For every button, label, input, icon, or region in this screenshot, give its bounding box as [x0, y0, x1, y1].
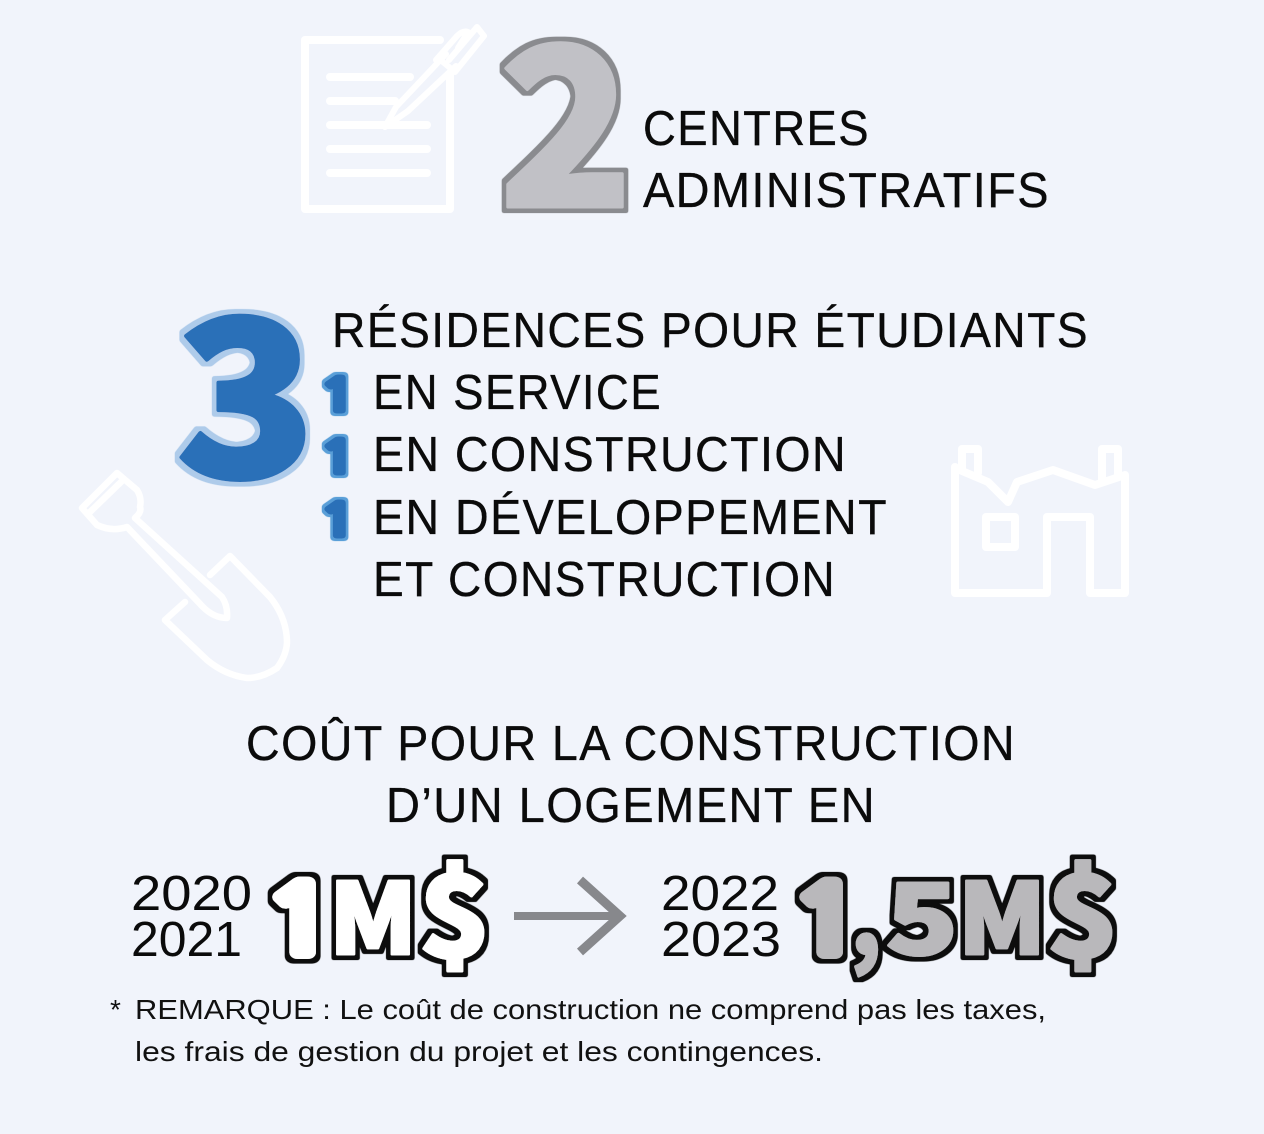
- heading: residences: RÉSIDENCES POUR ÉTUDIANTS: [332, 304, 1089, 358]
- value: 1 million: 1: [264, 875, 336, 968]
- label: years 2020 2021: 2021: [131, 913, 242, 967]
- value: 1.5 million: $: [1047, 826, 1119, 990]
- heading: cost per unit: COÛT POUR LA CONSTRUCTION: [246, 717, 1016, 771]
- heading: centres administratifs: ADMINISTRATIFS: [643, 164, 1050, 218]
- panel: student residences: [82, 224, 1125, 678]
- value: 1.5 million: ,: [851, 841, 881, 983]
- list item: en developpement et construction: EN DÉVELOPPEMENT: [373, 491, 888, 545]
- list item: en developpement et construction: [320, 491, 888, 607]
- big number 3: 3: [176, 224, 316, 540]
- label: years 2020 2021: 2020: [131, 867, 252, 921]
- arrow: [514, 880, 620, 952]
- list item: en construction: 1: [320, 435, 356, 480]
- heading: cost per unit: D’UN LOGEMENT EN: [386, 779, 876, 833]
- footnote: *: [110, 994, 121, 1025]
- footnote: REMARQUE : Le coût de construction ne comprend pas les taxes,: [135, 994, 1046, 1025]
- value: 1.5 million: M: [958, 841, 1046, 983]
- footnote: les frais de gestion du projet et les contingences.: [135, 1036, 823, 1067]
- value: 1 million: $: [419, 826, 491, 990]
- value: 1.5 million: 5: [886, 841, 958, 983]
- value: 1.5 million: 1: [791, 875, 863, 968]
- value: 1 million: M: [329, 841, 417, 983]
- label: years 2022 2023: 2023: [661, 913, 781, 967]
- panel: administrative centres: [305, 0, 1050, 271]
- heading: centres administratifs: CENTRES: [643, 102, 870, 156]
- icon: factory building: [955, 449, 1125, 593]
- panel: construction cost: [110, 717, 1119, 1067]
- list item: en developpement et construction: ET CONSTRUCTION: [373, 553, 836, 607]
- icon: shovel: [82, 473, 287, 678]
- list item: en construction: EN CONSTRUCTION: [373, 428, 847, 482]
- icon: document and pen: [305, 27, 484, 209]
- list item: en service: EN SERVICE: [373, 366, 662, 420]
- label: years 2022 2023: 2022: [661, 867, 779, 921]
- list item: en service: 1: [320, 373, 356, 418]
- list item: en developpement et construction: 1: [320, 498, 356, 543]
